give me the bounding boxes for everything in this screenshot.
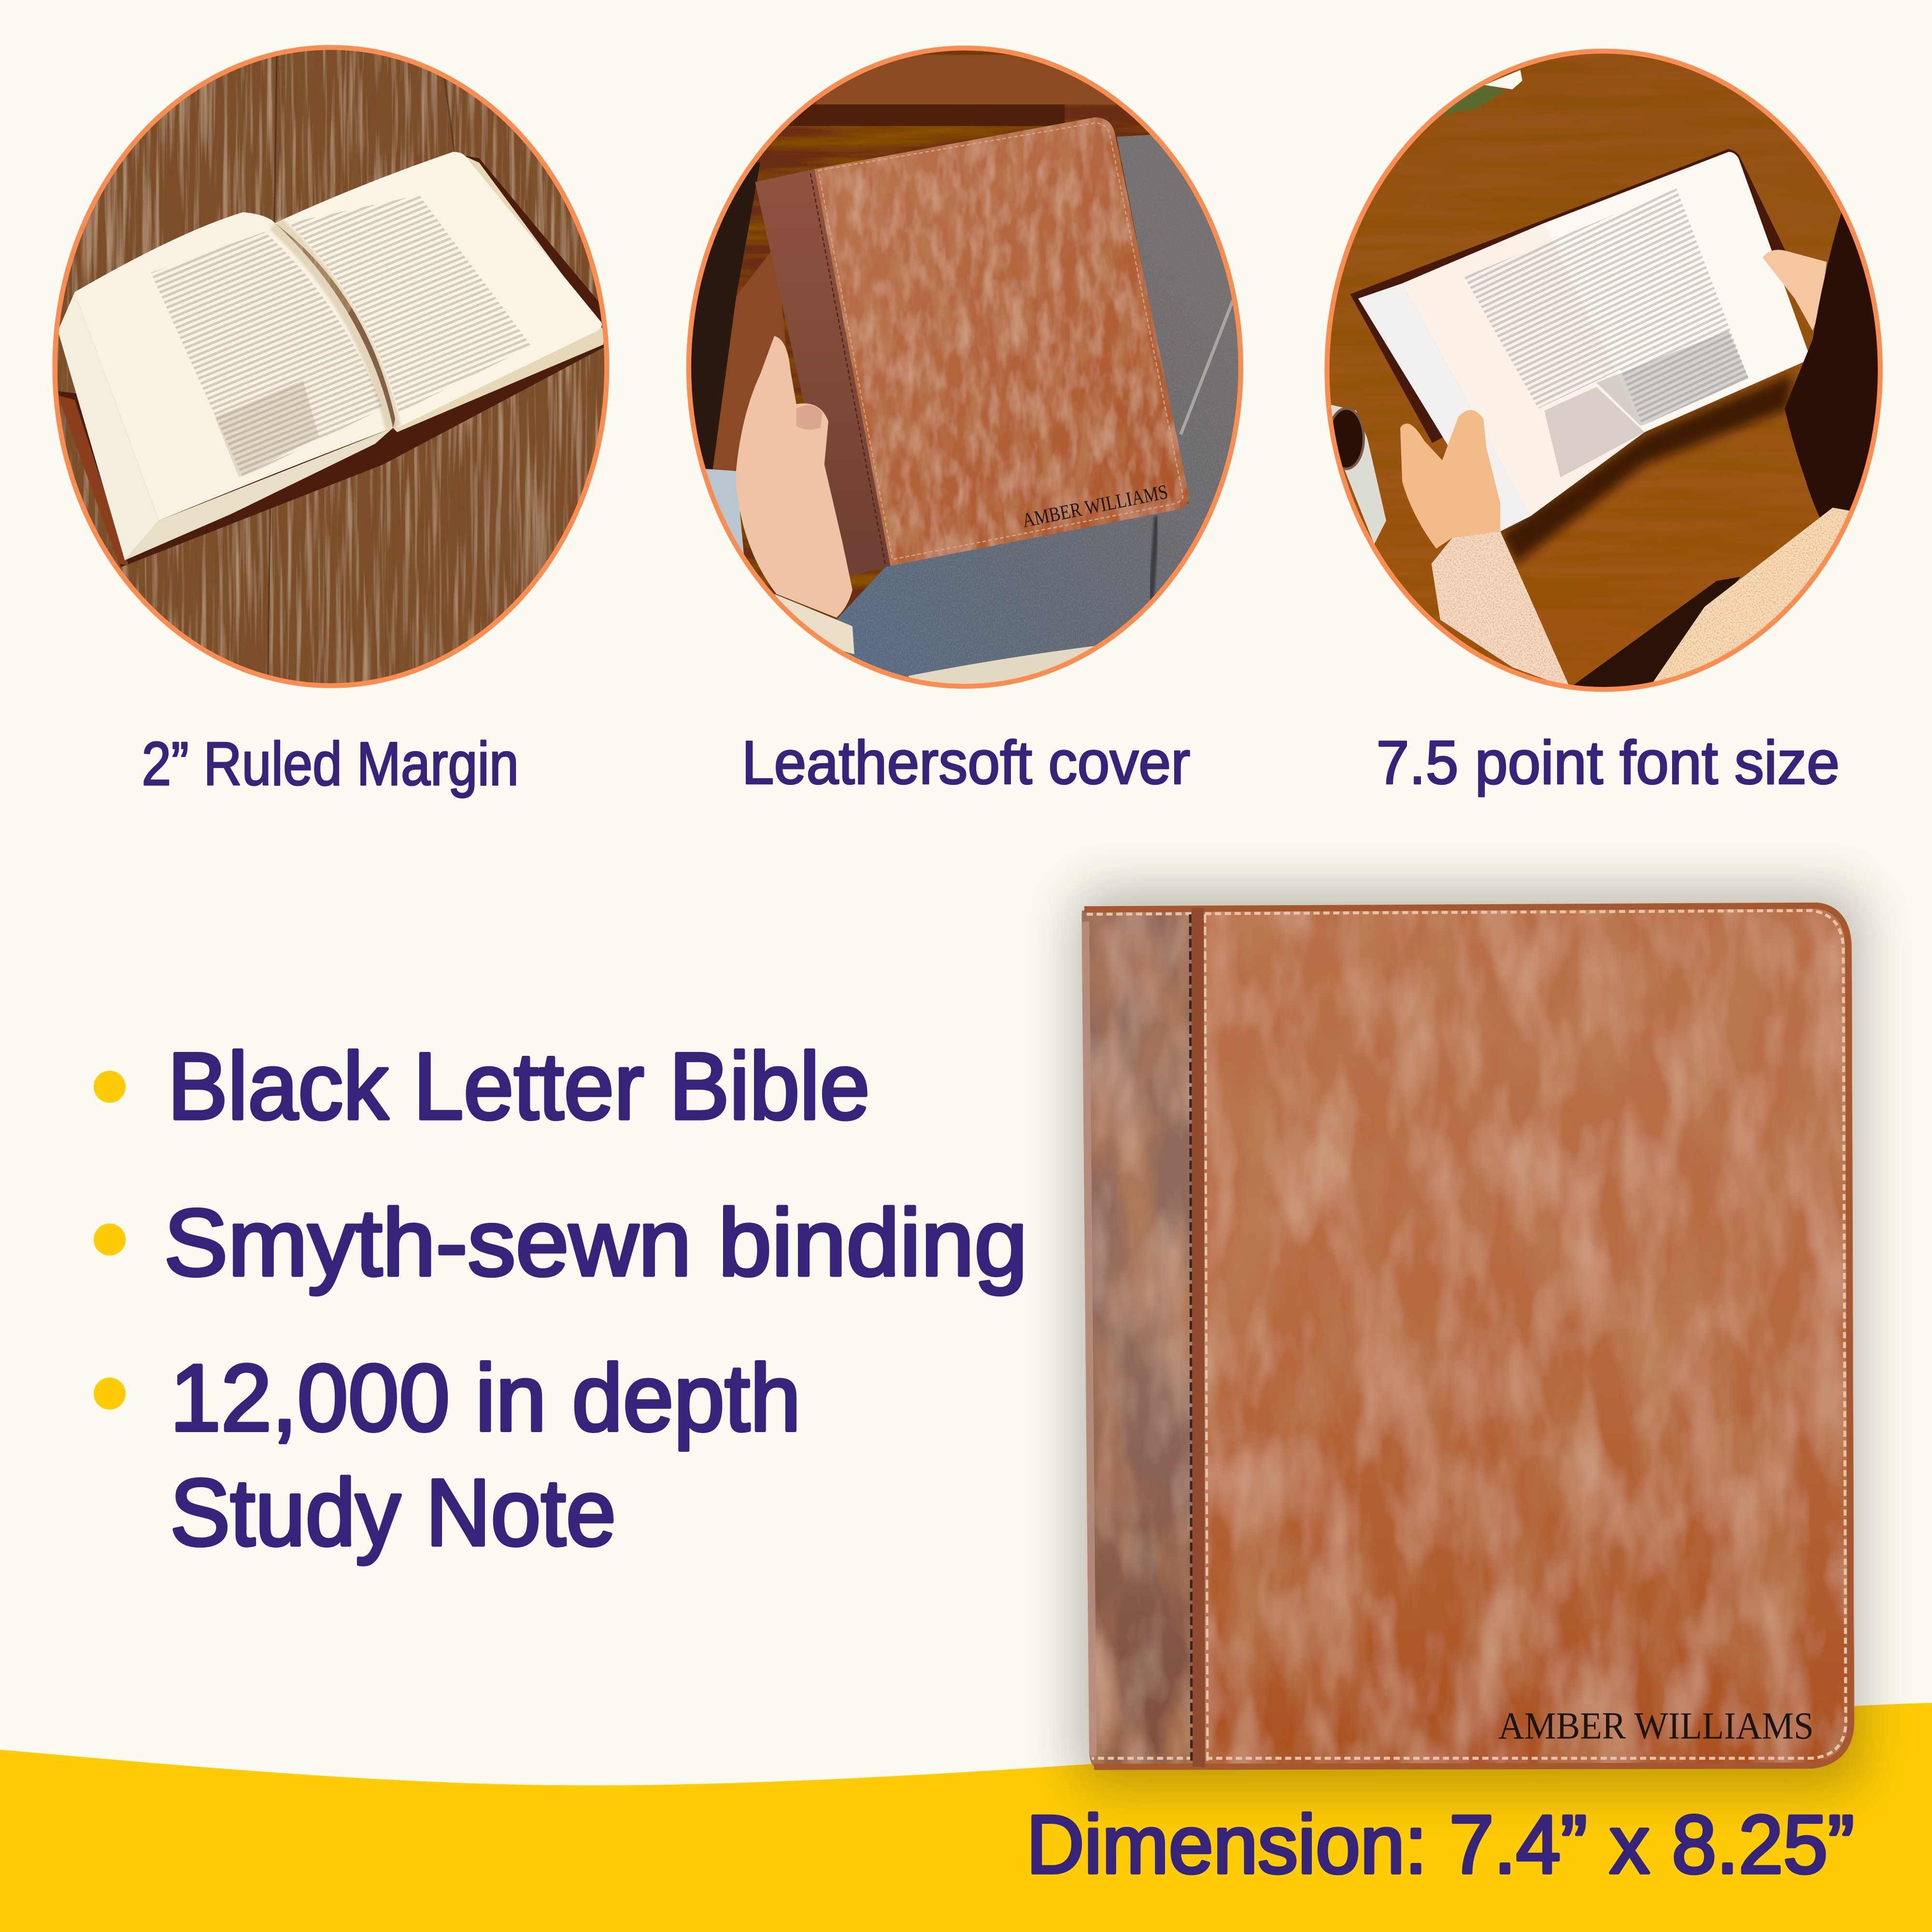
photo: reading at table <box>1319 43 1891 696</box>
mug <box>1328 404 1386 544</box>
engraved name: AMBER WILLIAMS <box>1498 1705 1814 1747</box>
ring <box>689 48 1241 686</box>
top edge band <box>1084 906 1851 1767</box>
dimension label: Dimension: 7.4” x 8.25” <box>1026 1799 1854 1891</box>
feature: smyth-sewn binding: Smyth-sewn binding <box>164 1189 1028 1295</box>
hair <box>1785 201 1885 542</box>
leaf and napkin <box>1440 85 1505 115</box>
caption: leathersoft cover: Leathersoft cover <box>742 728 1190 797</box>
hand <box>736 336 852 618</box>
gutter shade <box>275 223 393 428</box>
photo: open bible on wood floor <box>49 43 616 690</box>
ring <box>1327 51 1880 689</box>
caption: ruled margin: 2” Ruled Margin <box>142 730 519 798</box>
text left <box>151 232 383 478</box>
left page <box>75 212 393 521</box>
right page <box>275 152 602 428</box>
feature: study notes: Study Note <box>170 1459 616 1565</box>
page spread <box>1402 152 1811 516</box>
yellow wave band <box>0 1703 1932 1932</box>
ring <box>55 47 607 686</box>
engraved name: AMBER WILLIAMS <box>1021 481 1170 532</box>
right hand <box>1762 250 1827 331</box>
book shadow <box>1074 890 1863 1789</box>
table edge <box>1568 577 1741 689</box>
bullet 1 <box>94 1071 126 1103</box>
large leather bible cover <box>1074 890 1863 1789</box>
leather cover <box>1350 149 1787 443</box>
feature list <box>94 1033 1028 1565</box>
page block left <box>58 292 159 560</box>
right sleeve <box>1648 508 1881 689</box>
seam strip <box>1192 908 1205 1767</box>
text columns <box>1464 188 1748 426</box>
stitching <box>1087 910 1846 1758</box>
book front <box>814 117 1189 566</box>
photo: leathersoft cover held on lap <box>684 43 1250 693</box>
front cover <box>1193 903 1854 1769</box>
spine highlight <box>1085 922 1093 1756</box>
front stitching <box>1205 914 1208 1762</box>
shadow of book <box>1500 374 1792 564</box>
spine stitching <box>1190 914 1192 1762</box>
stitches <box>818 123 1183 559</box>
feature: study notes: 12,000 in depth <box>170 1345 801 1451</box>
bullet 3 <box>94 1378 126 1409</box>
jeans <box>837 135 1249 689</box>
feature: study notes <box>170 1345 801 1565</box>
feature: black letter bible: Black Letter Bible <box>168 1033 870 1139</box>
left hand <box>1400 410 1500 549</box>
bullet 2 <box>94 1223 126 1255</box>
sweater cuff <box>774 594 854 654</box>
book spine <box>755 169 891 578</box>
left sleeve cuff <box>1432 531 1570 689</box>
page block right <box>393 152 604 432</box>
spine <box>1082 906 1193 1769</box>
caption: font size: 7.5 point font size <box>1376 728 1840 797</box>
book cover <box>58 154 607 567</box>
text right <box>289 195 531 413</box>
left page block <box>1358 284 1530 531</box>
